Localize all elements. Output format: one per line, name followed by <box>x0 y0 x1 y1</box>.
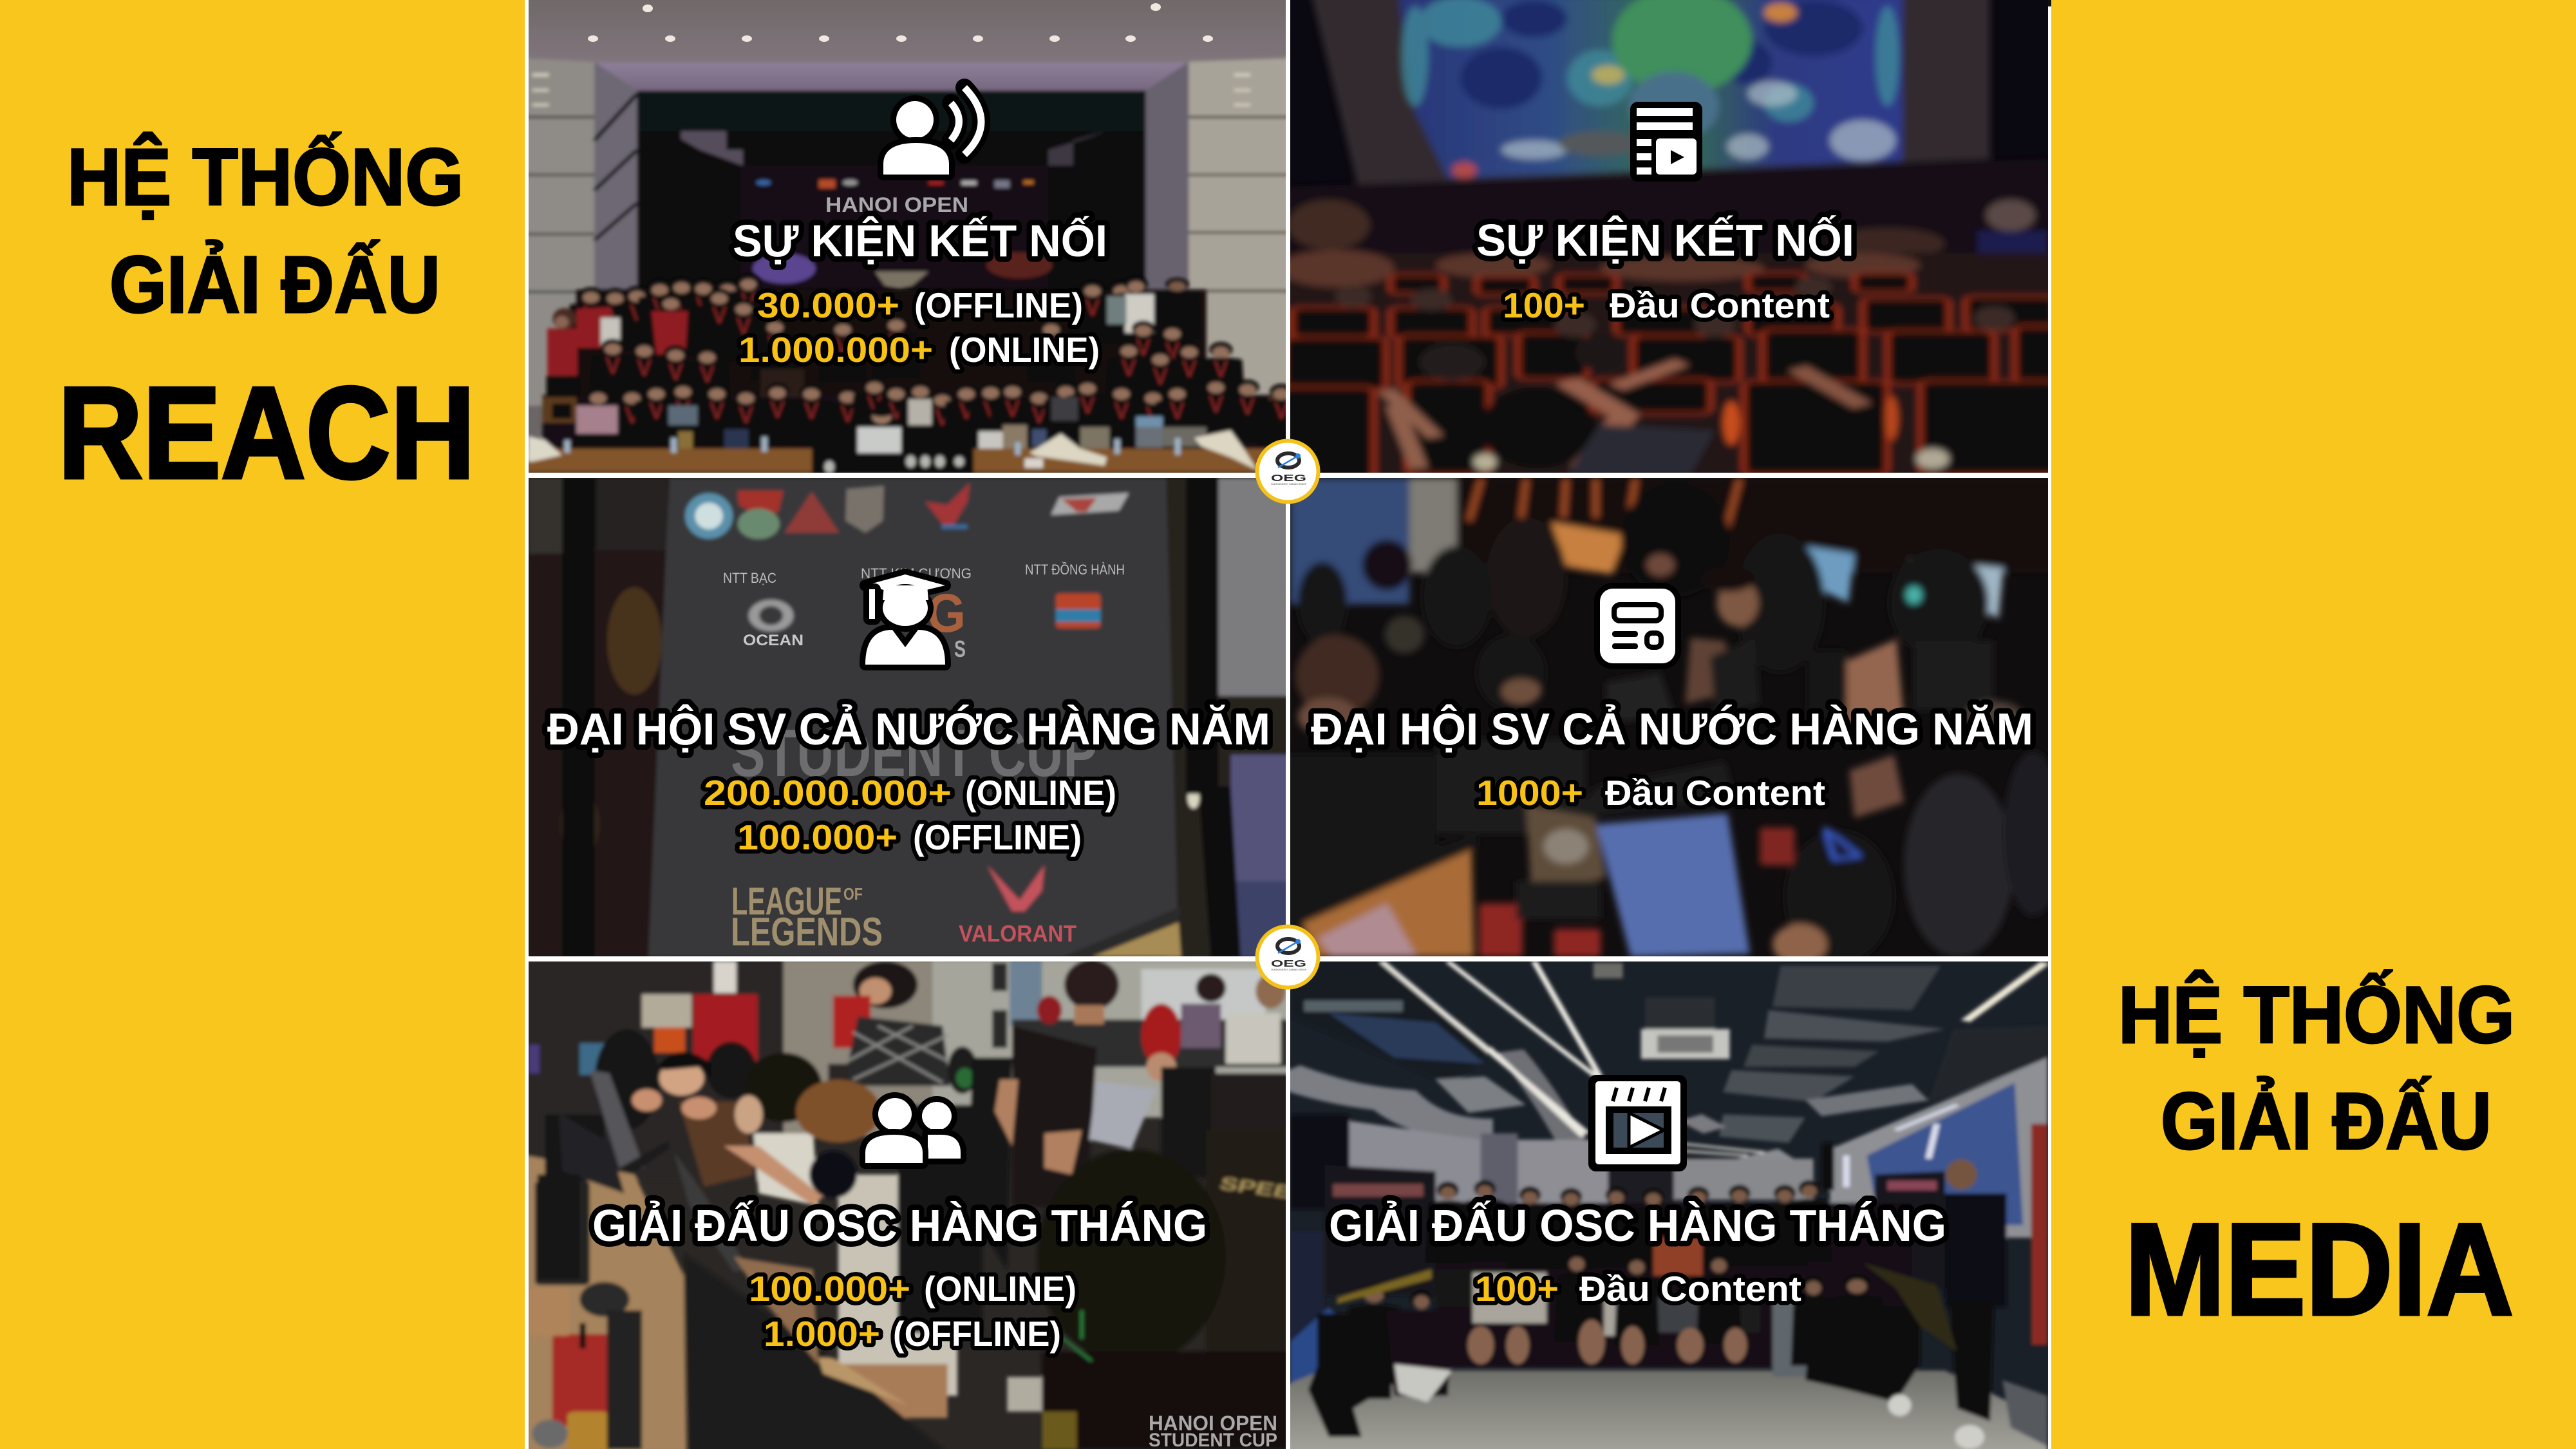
photo: sponsor poster: VALORANT <box>959 920 1076 947</box>
stat: content count: Đầu Content <box>1605 773 1825 813</box>
logo badge: lower OEG: OCEAN ENERGY GAMING GROUP <box>1271 968 1306 971</box>
panel: reach national student congress <box>529 478 1295 958</box>
stat: offline reach: (OFFLINE) <box>914 285 1083 325</box>
panel: reach title left <box>58 133 475 506</box>
panel: media title right <box>2118 971 2515 1343</box>
photo: players at tournament: HANOI OPEN <box>1149 1412 1277 1435</box>
photo: sponsor poster: OCEAN <box>743 632 804 649</box>
stat: offline reach: 100.000+ <box>737 817 898 857</box>
heading line GIẢI ĐẤU: GIẢI ĐẤU <box>2161 1077 2492 1166</box>
panel: reach monthly tournament <box>525 960 1314 1449</box>
photo: sponsor poster: LEAGUE <box>731 880 842 923</box>
stat: online reach <box>704 773 1116 813</box>
logo badge: upper OEG <box>1257 440 1319 502</box>
stat: content count: 100+ <box>1475 1269 1559 1309</box>
photo: sponsor poster <box>529 478 1295 958</box>
icon: graduate student <box>865 574 945 665</box>
icon: video list <box>1630 102 1702 182</box>
photo: players at tournament: SPEED <box>1217 1173 1314 1205</box>
title: SỰ KIỆN KẾT NỐI <box>1476 214 1854 265</box>
stat: online reach: 100.000+ <box>749 1269 910 1309</box>
stat: content count: 1000+ <box>1476 773 1583 813</box>
photo: sponsor poster: NTT ĐỒNG HÀNH <box>1025 562 1125 578</box>
panel: media connection events <box>1279 0 2064 487</box>
right edge tick <box>2048 0 2051 6</box>
photo: sponsor poster: STUDENT CUP <box>731 716 1098 791</box>
heading REACH: REACH <box>58 360 475 506</box>
photo: auditorium group <box>512 0 1306 475</box>
stat: online reach <box>738 330 1100 370</box>
stat: online reach: (ONLINE) <box>924 1269 1076 1309</box>
ceiling lights <box>588 3 1213 42</box>
icon: browser form <box>1600 589 1675 663</box>
stat: offline reach <box>764 1314 1061 1354</box>
photo: sponsor poster: NTT BẠC <box>723 570 776 586</box>
title: SỰ KIỆN KẾT NỐI <box>733 215 1107 266</box>
title: GIẢI ĐẤU OSC HÀNG THÁNG <box>592 1200 1207 1251</box>
photo: sponsor poster: OF <box>843 884 863 904</box>
stat: online reach: (ONLINE) <box>949 330 1100 370</box>
stat: offline reach: 1.000+ <box>764 1314 880 1354</box>
stat: offline reach: (OFFLINE) <box>893 1314 1061 1354</box>
photo: sponsor poster: LEGENDS <box>731 910 883 954</box>
stat: content count: Đầu Content <box>1610 285 1830 325</box>
stat: online reach: 1.000.000+ <box>738 330 933 370</box>
heading line HỆ THỐNG: HỆ THỐNG <box>67 133 464 222</box>
photo: team group indoors <box>1279 960 2048 1449</box>
logo badge: upper OEG: OEG <box>1271 473 1306 484</box>
panel: media monthly tournament <box>1279 960 2048 1449</box>
title: ĐẠI HỘI SV CẢ NƯỚC HÀNG NĂM <box>1311 703 2033 754</box>
icon: clapperboard video <box>1588 1075 1687 1171</box>
stat: offline reach: 30.000+ <box>757 285 899 325</box>
stat: offline reach <box>737 817 1082 857</box>
stat: content count <box>1475 1269 1801 1309</box>
heading line HỆ THỐNG: HỆ THỐNG <box>2118 971 2515 1060</box>
stat: content count: 100+ <box>1503 285 1585 325</box>
icon: speaking person <box>883 88 981 175</box>
photo: cinema screening <box>1279 0 2064 487</box>
stat: content count <box>1476 773 1825 813</box>
photo: gaming room <box>1288 478 2063 965</box>
center white frame <box>525 0 2051 1449</box>
panel: reach connection events <box>512 0 1306 475</box>
panel: media national student congress <box>1288 478 2063 965</box>
stat: content count: Đầu Content <box>1579 1269 1801 1309</box>
stat: online reach: (ONLINE) <box>965 773 1116 813</box>
photo: sponsor poster: S <box>954 636 966 662</box>
title: ĐẠI HỘI SV CẢ NƯỚC HÀNG NĂM <box>547 703 1270 754</box>
logo badge: lower OEG: OEG <box>1271 958 1306 969</box>
logo badge: lower OEG <box>1257 926 1319 988</box>
logo badge: upper OEG: OCEAN ENERGY GAMING GROUP <box>1271 482 1306 486</box>
stat: online reach: 200.000.000+ <box>704 773 952 813</box>
heading MEDIA: MEDIA <box>2125 1197 2514 1343</box>
stat: offline reach: (OFFLINE) <box>913 817 1082 857</box>
heading line GIẢI ĐẤU: GIẢI ĐẤU <box>109 240 440 330</box>
photo: sponsor poster: G <box>927 583 966 643</box>
photo: players at tournament <box>525 960 1314 1449</box>
photo: sponsor poster: NTT KIM CƯƠNG <box>861 565 972 582</box>
title: GIẢI ĐẤU OSC HÀNG THÁNG <box>1329 1200 1946 1251</box>
stat: content count <box>1503 285 1830 325</box>
photo: auditorium group: HANOI OPEN <box>825 193 968 216</box>
stat: offline reach <box>757 285 1083 325</box>
icon: two people <box>865 1098 961 1163</box>
stat: online reach <box>749 1269 1076 1309</box>
